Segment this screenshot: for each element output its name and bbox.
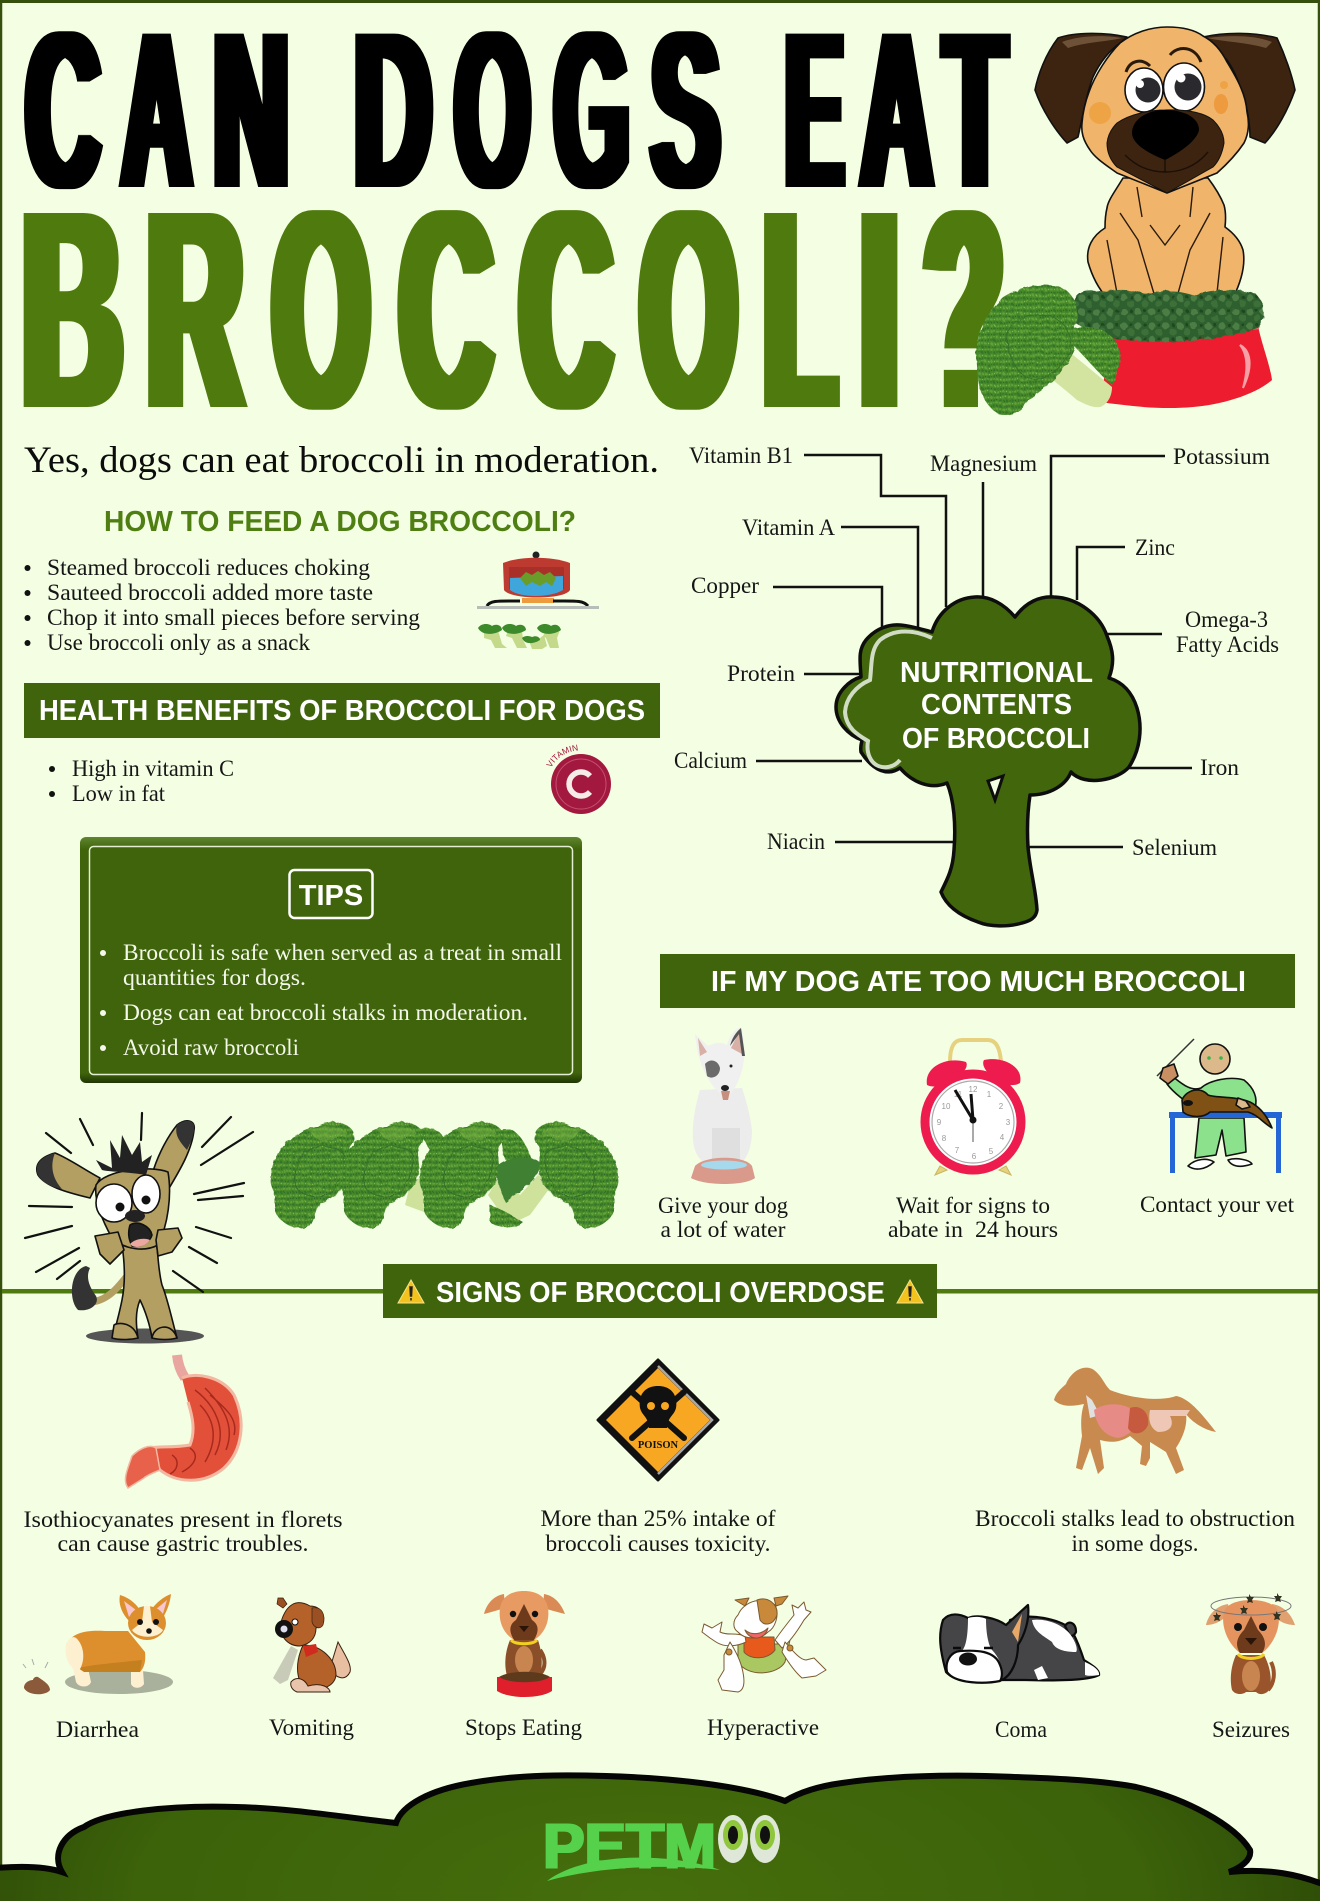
panel: health benefits [24, 683, 660, 814]
icon: poison sign: POISON [638, 1440, 679, 1451]
icon: white dog with water bowl [691, 1027, 755, 1184]
icon: alarm clock: 2 [999, 1102, 1004, 1111]
nutrient labels: Zinc [1135, 535, 1175, 560]
title [22, 0, 1006, 467]
icon: hyperactive dog [702, 1596, 826, 1692]
panel: if my dog ate too much [658, 954, 1295, 1242]
feeding tips list: Use broccoli only as a snack [47, 630, 310, 655]
icon: chopped broccoli [478, 624, 561, 649]
action labels: a lot of water [660, 1217, 786, 1242]
illustration: scared dog [25, 1113, 253, 1344]
icon: alarm clock: 9 [937, 1118, 942, 1127]
heading bar [660, 954, 1295, 1008]
icon: alarm clock: 4 [1000, 1133, 1005, 1142]
icon: alarm clock: 8 [942, 1134, 947, 1143]
icon: stomach [125, 1355, 241, 1488]
heading bar: health benefits: HEALTH BENEFITS OF BROCCOLI FOR DOGS [39, 695, 645, 727]
icon: alarm clock: 10 [942, 1102, 951, 1111]
symptom labels: Seizures [1212, 1717, 1290, 1742]
heading bar: SIGNS OF BROCCOLI OVERDOSE [436, 1277, 885, 1309]
action labels: Wait for signs to [896, 1193, 1050, 1218]
title line 2: R [147, 152, 242, 467]
sign descriptions [24, 1506, 1296, 1556]
symptom labels [56, 1715, 1290, 1742]
benefits list: Low in fat [72, 781, 166, 806]
feeding tips list [24, 555, 420, 655]
heading bar: health benefits [24, 683, 660, 738]
icon: vitamin C badge: VITAMIN [546, 744, 578, 766]
benefits list [49, 756, 234, 806]
nutrient labels: Magnesium [930, 451, 1037, 476]
feeding tips list: Sauteed broccoli added more taste [47, 580, 373, 605]
heading bar: IF MY DOG ATE TOO MUCH BROCCOLI [711, 966, 1246, 998]
feeding tips list: Chop it into small pieces before serving [47, 605, 420, 630]
icon: poison sign [598, 1360, 718, 1480]
tail [92, 1272, 130, 1302]
diagram title: CONTENTS [921, 689, 1072, 721]
icon: alarm clock: 5 [989, 1147, 994, 1156]
tips list: Dogs can eat broccoli stalks in moderation. [123, 1000, 528, 1025]
ears [37, 1153, 100, 1198]
icon: alarm clock [925, 1040, 1021, 1175]
sign descriptions: in some dogs. [1072, 1531, 1198, 1556]
logo: PETM [543, 1810, 716, 1882]
nutrient labels: Omega-3 [1185, 607, 1268, 632]
action labels: Give your dog [658, 1193, 788, 1218]
title line 2: C [400, 152, 492, 467]
dog ears [1035, 33, 1127, 143]
sign descriptions: More than 25% intake of [540, 1506, 776, 1531]
action labels [658, 1192, 1295, 1242]
vet torso and arms [1167, 1076, 1256, 1112]
water bowl [691, 1158, 755, 1184]
paws [95, 1228, 182, 1264]
broccoli row [271, 1122, 618, 1228]
bowl [1100, 326, 1272, 408]
nutrient labels: Potassium [1173, 444, 1270, 469]
eyes [96, 1184, 132, 1222]
icon: alarm clock: 6 [972, 1152, 977, 1161]
body and legs [114, 1240, 177, 1338]
diagram title [900, 657, 1093, 755]
nutrient labels: Calcium [674, 748, 747, 773]
intro sentence: Yes, dogs can eat broccoli in moderation. [24, 440, 659, 481]
crowns [271, 1122, 354, 1228]
nutrient labels: Iron [1200, 755, 1239, 780]
tips list: Broccoli is safe when served as a treat in small [123, 940, 562, 965]
illustration: dog sitting at a broccoli bowl [976, 27, 1295, 415]
nutrient labels: Vitamin A [742, 515, 835, 540]
tips list [100, 940, 562, 1060]
nutrient labels: Vitamin B1 [689, 443, 793, 468]
tips heading [290, 870, 372, 918]
sign descriptions: can cause gastric troubles. [58, 1531, 308, 1556]
icon: steaming pot on a stove [477, 552, 599, 609]
connector lines [756, 455, 1192, 847]
section divider line [2, 1289, 1318, 1294]
icon: corgi (diarrhea) [23, 1594, 173, 1694]
nutrient labels: Selenium [1132, 835, 1217, 860]
icon: vet with dog on table [1157, 1039, 1282, 1173]
benefits list: High in vitamin C [72, 756, 234, 781]
dog head [1082, 27, 1248, 193]
burst lines [25, 1113, 253, 1292]
head [96, 1169, 170, 1249]
icon: dog with food bowl [484, 1591, 565, 1697]
nutrient labels: Protein [727, 661, 795, 686]
sign descriptions: broccoli causes toxicity. [546, 1531, 770, 1556]
icon: dizzy dog seizures [1206, 1593, 1295, 1694]
title line 2: I [860, 152, 899, 467]
tips list: quantities for dogs. [123, 965, 306, 990]
mouth [129, 1223, 152, 1246]
icon: warning right [897, 1280, 923, 1303]
action labels: Contact your vet [1140, 1192, 1295, 1217]
broccoli shape [836, 597, 1140, 926]
icon: alarm clock: 11 [954, 1090, 963, 1099]
icon: warning left [398, 1280, 424, 1303]
sign descriptions: Isothiocyanates present in florets [24, 1507, 343, 1532]
icon: bulldog in coma [940, 1605, 1099, 1683]
hair [96, 1135, 152, 1175]
dog haunches and body [1088, 178, 1244, 298]
symptom labels: Diarrhea [56, 1717, 139, 1742]
icon: alarm clock: 1 [987, 1090, 992, 1099]
symptoms row [23, 1591, 1295, 1742]
broccoli floret [1053, 350, 1112, 407]
icon: dog anatomy [1054, 1368, 1216, 1474]
nutrient labels: Copper [691, 573, 759, 598]
dog muzzle and nose [1107, 110, 1224, 193]
symptom labels: Hyperactive [707, 1715, 819, 1740]
nutrition diagram [674, 443, 1279, 926]
dog on table [1182, 1090, 1272, 1128]
symptom labels: Vomiting [269, 1715, 354, 1740]
stems [405, 1175, 552, 1222]
diagram title: NUTRITIONAL [900, 657, 1093, 689]
symptom labels: Stops Eating [465, 1715, 582, 1740]
panel: signs of overdose [24, 1264, 1296, 1556]
nutrient labels [674, 443, 1279, 860]
panel: tips [80, 837, 582, 1083]
symptom labels: Coma [995, 1717, 1047, 1742]
feeding tips list: Steamed broccoli reduces choking [47, 555, 371, 580]
action labels: abate in 24 hours [888, 1217, 1058, 1242]
dog eyes [1125, 68, 1163, 112]
broccoli in bowl [1071, 290, 1264, 342]
footer cloud [0, 1775, 1320, 1901]
shadow [86, 1328, 204, 1344]
title line 2: O [641, 152, 736, 467]
tips heading: TIPS [299, 880, 363, 912]
infographic canvas: ? [924, 152, 1003, 467]
icon: vitamin C badge [546, 744, 611, 814]
title line 2: L [764, 152, 836, 467]
icon: dog vomiting [273, 1598, 350, 1692]
title line 2: C [520, 152, 611, 467]
panel: how to feed [24, 506, 599, 655]
tips list: Avoid raw broccoli [123, 1035, 299, 1060]
heading bar [383, 1264, 937, 1318]
heading: how to feed: HOW TO FEED A DOG BROCCOLI? [104, 506, 576, 538]
nutrient labels: Fatty Acids [1176, 632, 1279, 657]
title line 2: O [273, 152, 369, 467]
icon: alarm clock: 7 [955, 1146, 960, 1155]
icon: alarm clock: 12 [969, 1085, 978, 1094]
title line 2: B [22, 152, 122, 467]
vet trousers [1195, 1118, 1246, 1158]
icon: alarm clock: 3 [1006, 1118, 1011, 1127]
nutrient labels: Niacin [767, 829, 825, 854]
diagram title: OF BROCCOLI [902, 723, 1090, 755]
sign descriptions: Broccoli stalks lead to obstruction [975, 1506, 1296, 1531]
